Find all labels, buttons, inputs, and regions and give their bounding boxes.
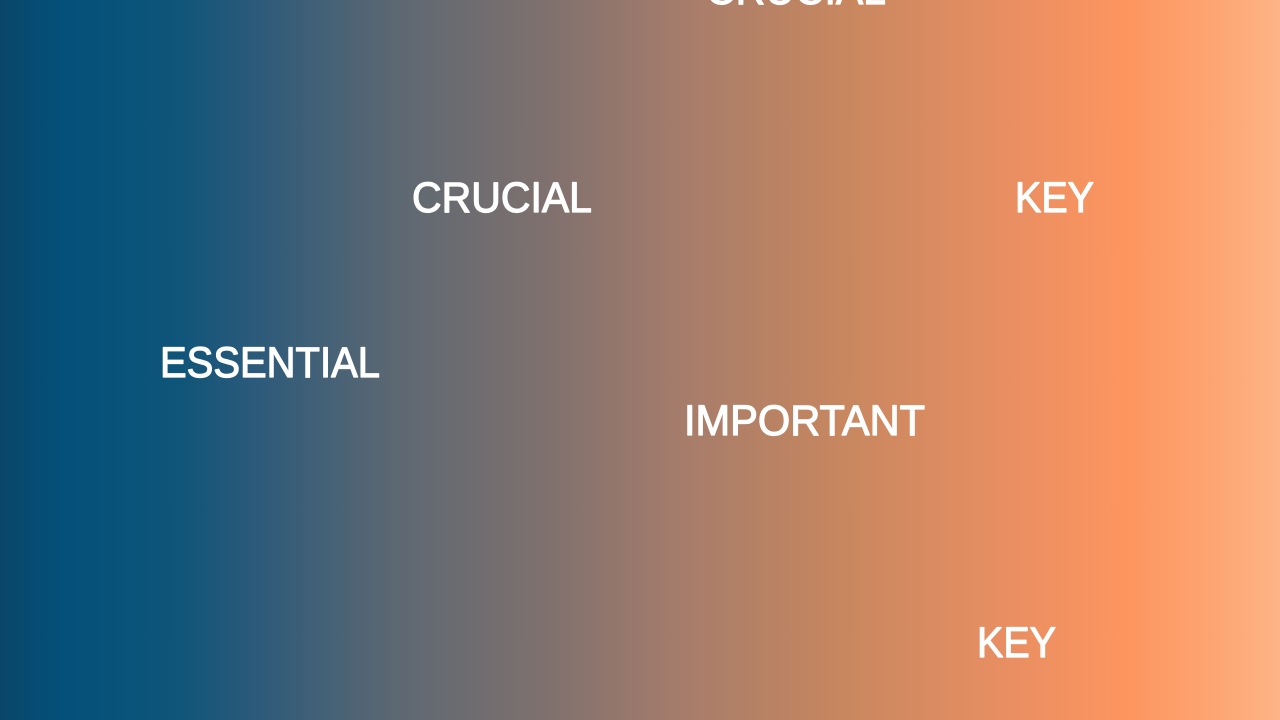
word: important: IMPORTANT <box>684 397 925 445</box>
word: crucial: CRUCIAL <box>412 174 592 222</box>
word: key lower: KEY <box>977 619 1056 667</box>
word: essential: ESSENTIAL <box>160 339 380 387</box>
word: key upper: KEY <box>1015 174 1094 222</box>
